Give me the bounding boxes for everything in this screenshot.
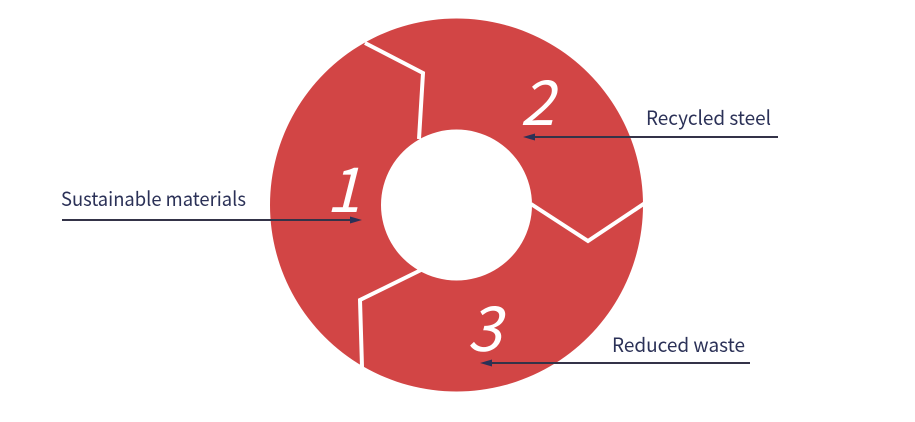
arrow: sustainable materials [62,216,362,224]
label: sustainable materials: Sustainable materials [61,183,246,212]
arrow: recycled steel [523,134,778,140]
label: reduced waste: Reduced waste [612,329,745,358]
separator: segments 1 and 2 [365,43,423,139]
number 1: 1 [326,140,360,230]
arrow: reduced waste [480,360,750,366]
number 2: 2 [520,53,560,143]
ring [270,18,643,392]
separator: segments 1 and 3 [360,270,421,367]
separator: segments 2 and 3 [531,203,645,241]
donut cycle chart [270,18,645,392]
label: recycled steel: Recycled steel [646,102,771,131]
number 3: 3 [467,279,507,369]
